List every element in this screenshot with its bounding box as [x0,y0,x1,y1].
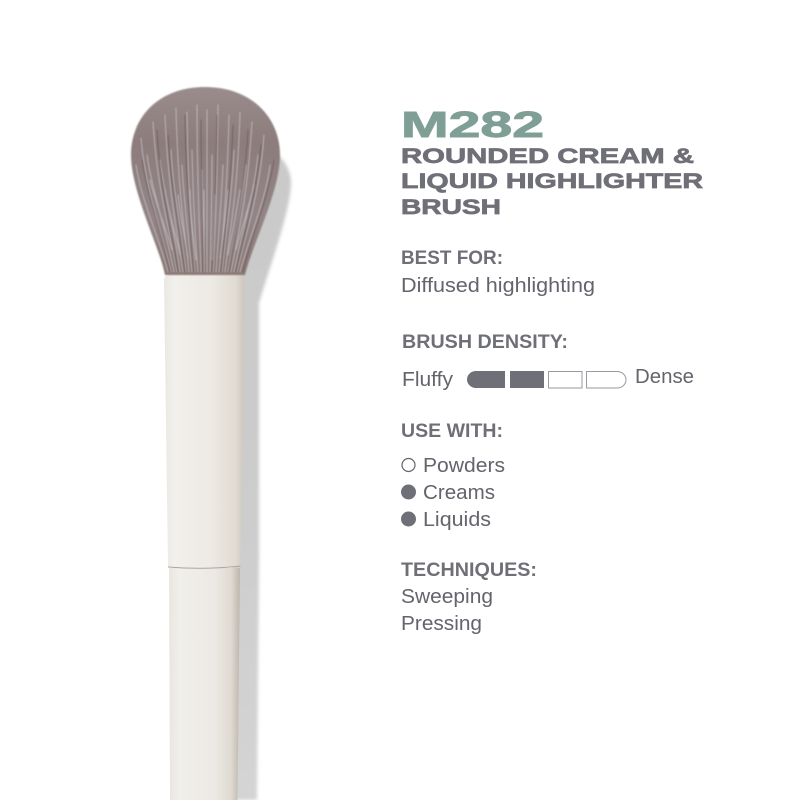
section: brush density: BRUSH DENSITY: [402,332,568,353]
section: best for: BEST FOR: [401,248,503,269]
option: powders: Powders [423,455,505,477]
section: techniques: Pressing [401,613,482,635]
product name: ROUNDED CREAM & [401,145,694,168]
section: brush density: Fluffy [402,369,453,391]
option: liquids: Liquids [423,509,491,531]
density scale [467,371,626,388]
section: techniques: TECHNIQUES: [401,560,537,581]
section: brush density: Dense [635,366,694,388]
brush illustration [131,87,280,800]
section: techniques: Sweeping [401,586,493,608]
brush ferrule [164,274,244,568]
section: use with [401,421,505,531]
product name [401,145,703,219]
ferrule seam [168,566,240,568]
title: model number: M282 [401,104,544,145]
product name: LIQUID HIGHLIGHTER [401,170,703,193]
option: creams: Creams [423,482,495,504]
section: best for: Diffused highlighting [401,275,595,297]
product name: BRUSH [401,196,501,219]
brush handle [169,568,240,800]
section: best for [401,248,595,297]
brush shadow [232,150,291,800]
section: brush density [402,332,694,391]
section: use with: USE WITH: [401,421,503,442]
brush bristles [131,87,280,275]
section: techniques [401,560,537,635]
